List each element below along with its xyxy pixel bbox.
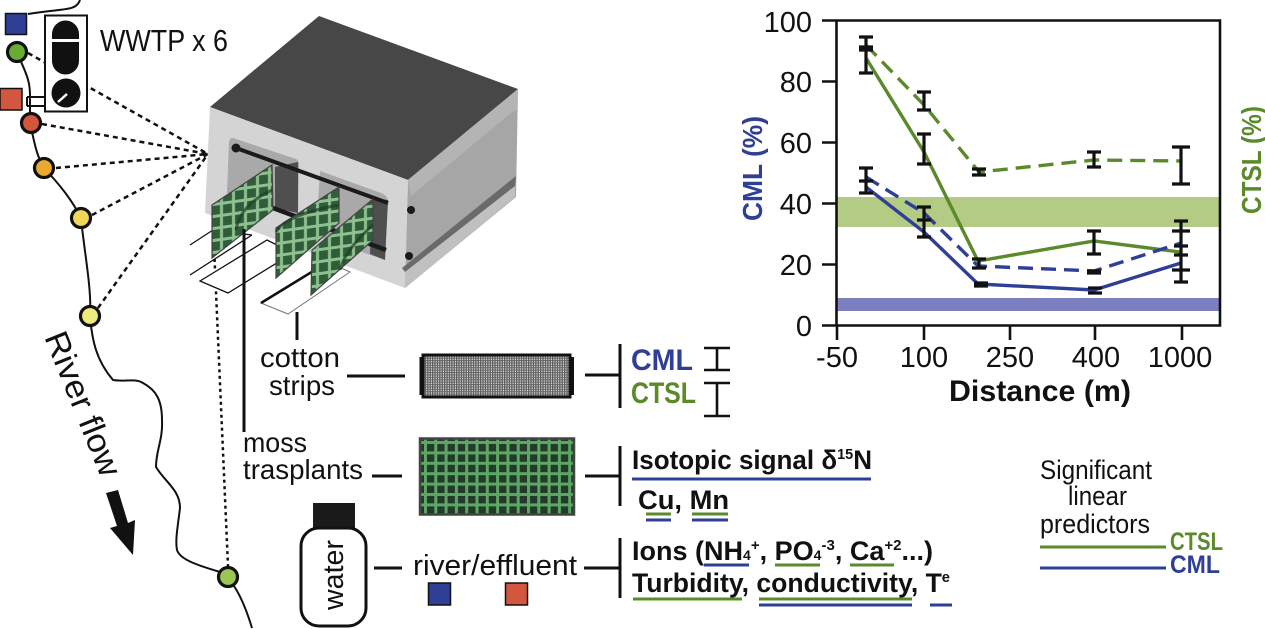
CML label: CML bbox=[631, 344, 693, 377]
x axis labels: -50 bbox=[816, 342, 858, 374]
cotton strips label bbox=[260, 342, 340, 401]
sampling point orange bbox=[34, 158, 54, 178]
blue reference band bbox=[837, 298, 1220, 311]
moss panel 2 bbox=[276, 187, 339, 278]
sampling point green bbox=[8, 42, 26, 62]
water predictors text: Turbidity, conductivity, T bbox=[632, 568, 947, 598]
sampling point red bbox=[22, 114, 40, 132]
WWTP label: WWTP x 6 bbox=[100, 23, 228, 58]
lower rod bbox=[273, 208, 386, 250]
water predictors text: -3 bbox=[821, 537, 835, 554]
line chart bbox=[737, 7, 1265, 408]
cotton strips label: strips bbox=[269, 370, 335, 401]
CTSL label: CTSL bbox=[631, 377, 696, 410]
icon: wastewater treatment plant bbox=[45, 16, 87, 112]
y axis labels bbox=[764, 7, 812, 343]
x axis labels: 100 bbox=[900, 342, 948, 374]
cotton strip sample bbox=[420, 355, 574, 397]
left axis title: CML (%) bbox=[737, 116, 768, 221]
legend: significant linear predictors: predictors bbox=[1040, 509, 1150, 539]
water predictors text: , Ca bbox=[835, 536, 885, 566]
y axis labels: 100 bbox=[764, 7, 812, 39]
water predictors text: ...) bbox=[901, 536, 933, 566]
CTSL solid series bbox=[866, 58, 1180, 261]
legend: significant linear predictors: linear bbox=[1068, 481, 1127, 511]
y axis labels: 0 bbox=[796, 311, 812, 343]
error bars bbox=[859, 37, 1190, 293]
moss predictors text: Isotopic signal δ bbox=[632, 445, 845, 475]
water bottle icon bbox=[301, 503, 366, 626]
CTSL dashed series bbox=[866, 45, 1181, 172]
connector: moss bbox=[242, 229, 246, 432]
x axis labels: 400 bbox=[1072, 342, 1120, 374]
river water square bbox=[428, 583, 450, 605]
moss transplant sample bbox=[420, 438, 574, 514]
mesocosm box bbox=[190, 16, 518, 314]
moss panel 1 bbox=[212, 165, 273, 258]
cotton strips under mesocosm bbox=[190, 230, 350, 314]
legend: significant linear predictors: CTSL bbox=[1170, 528, 1223, 556]
moss transplants label: trasplants bbox=[243, 454, 363, 485]
connectors between labels and samples bbox=[347, 344, 620, 598]
box top bbox=[210, 16, 518, 180]
upstream river sample square bbox=[6, 14, 26, 34]
CML dashed series bbox=[866, 177, 1181, 271]
x axis labels: 1000 bbox=[1148, 342, 1212, 374]
effluent pipe bbox=[27, 97, 45, 106]
bolts bbox=[407, 206, 415, 214]
moss predictors text: N bbox=[853, 445, 872, 475]
effluent sample square bbox=[0, 88, 22, 110]
cotton strips label: cotton bbox=[260, 342, 340, 373]
moss panel 3 bbox=[311, 199, 373, 295]
moss transplants label bbox=[243, 427, 363, 485]
right window bbox=[316, 171, 388, 260]
water predictors text: , PO bbox=[760, 536, 814, 566]
water predictors text: e bbox=[942, 569, 950, 586]
box right side bbox=[405, 89, 518, 288]
sampling point downstream bbox=[218, 568, 238, 586]
river/effluent label: river/effluent bbox=[413, 550, 577, 582]
river flow label: River flow bbox=[38, 326, 129, 482]
plot frame bbox=[822, 20, 1220, 340]
error bar symbols bbox=[704, 348, 730, 416]
water predictors text: Ions (NH4 bbox=[632, 536, 751, 566]
river line bbox=[17, 0, 252, 628]
legend: significant linear predictors: Significant bbox=[1040, 455, 1152, 485]
y axis labels: 80 bbox=[780, 67, 812, 99]
water bottle icon: water bbox=[318, 540, 350, 611]
x axis labels: 250 bbox=[986, 342, 1034, 374]
moss predictors text: Cu, Mn bbox=[638, 485, 729, 515]
water predictors text bbox=[632, 536, 952, 605]
water predictors text: 4 bbox=[814, 547, 822, 563]
sampling point pale yellow bbox=[80, 306, 100, 326]
moss transplants label: moss bbox=[243, 427, 307, 458]
water predictors text: +2 bbox=[884, 537, 901, 554]
x axis title: Distance (m) bbox=[949, 375, 1131, 408]
y axis labels: 40 bbox=[780, 189, 812, 221]
legend: significant linear predictors: CML bbox=[1170, 551, 1220, 579]
y axis labels: 20 bbox=[780, 250, 812, 282]
moss predictors text bbox=[632, 445, 872, 520]
CML solid series bbox=[866, 187, 1181, 290]
y axis labels: 60 bbox=[780, 128, 812, 160]
moss panel shading bbox=[236, 190, 373, 270]
left window bbox=[227, 138, 299, 218]
connector: cotton strips bbox=[296, 312, 298, 340]
dotted lines to sampling points bbox=[28, 53, 228, 566]
arrow: river flow direction bbox=[106, 490, 135, 555]
upper rod bbox=[236, 148, 388, 203]
moss predictors text: 15 bbox=[837, 446, 853, 463]
water predictors text: + bbox=[751, 537, 760, 554]
sampling point yellow bbox=[72, 208, 90, 228]
green reference band bbox=[837, 197, 1220, 227]
legend: significant linear predictors bbox=[1040, 455, 1223, 579]
x axis labels bbox=[816, 342, 1212, 374]
effluent water square bbox=[506, 583, 528, 605]
river map bbox=[0, 0, 252, 628]
box front face bbox=[205, 107, 408, 288]
